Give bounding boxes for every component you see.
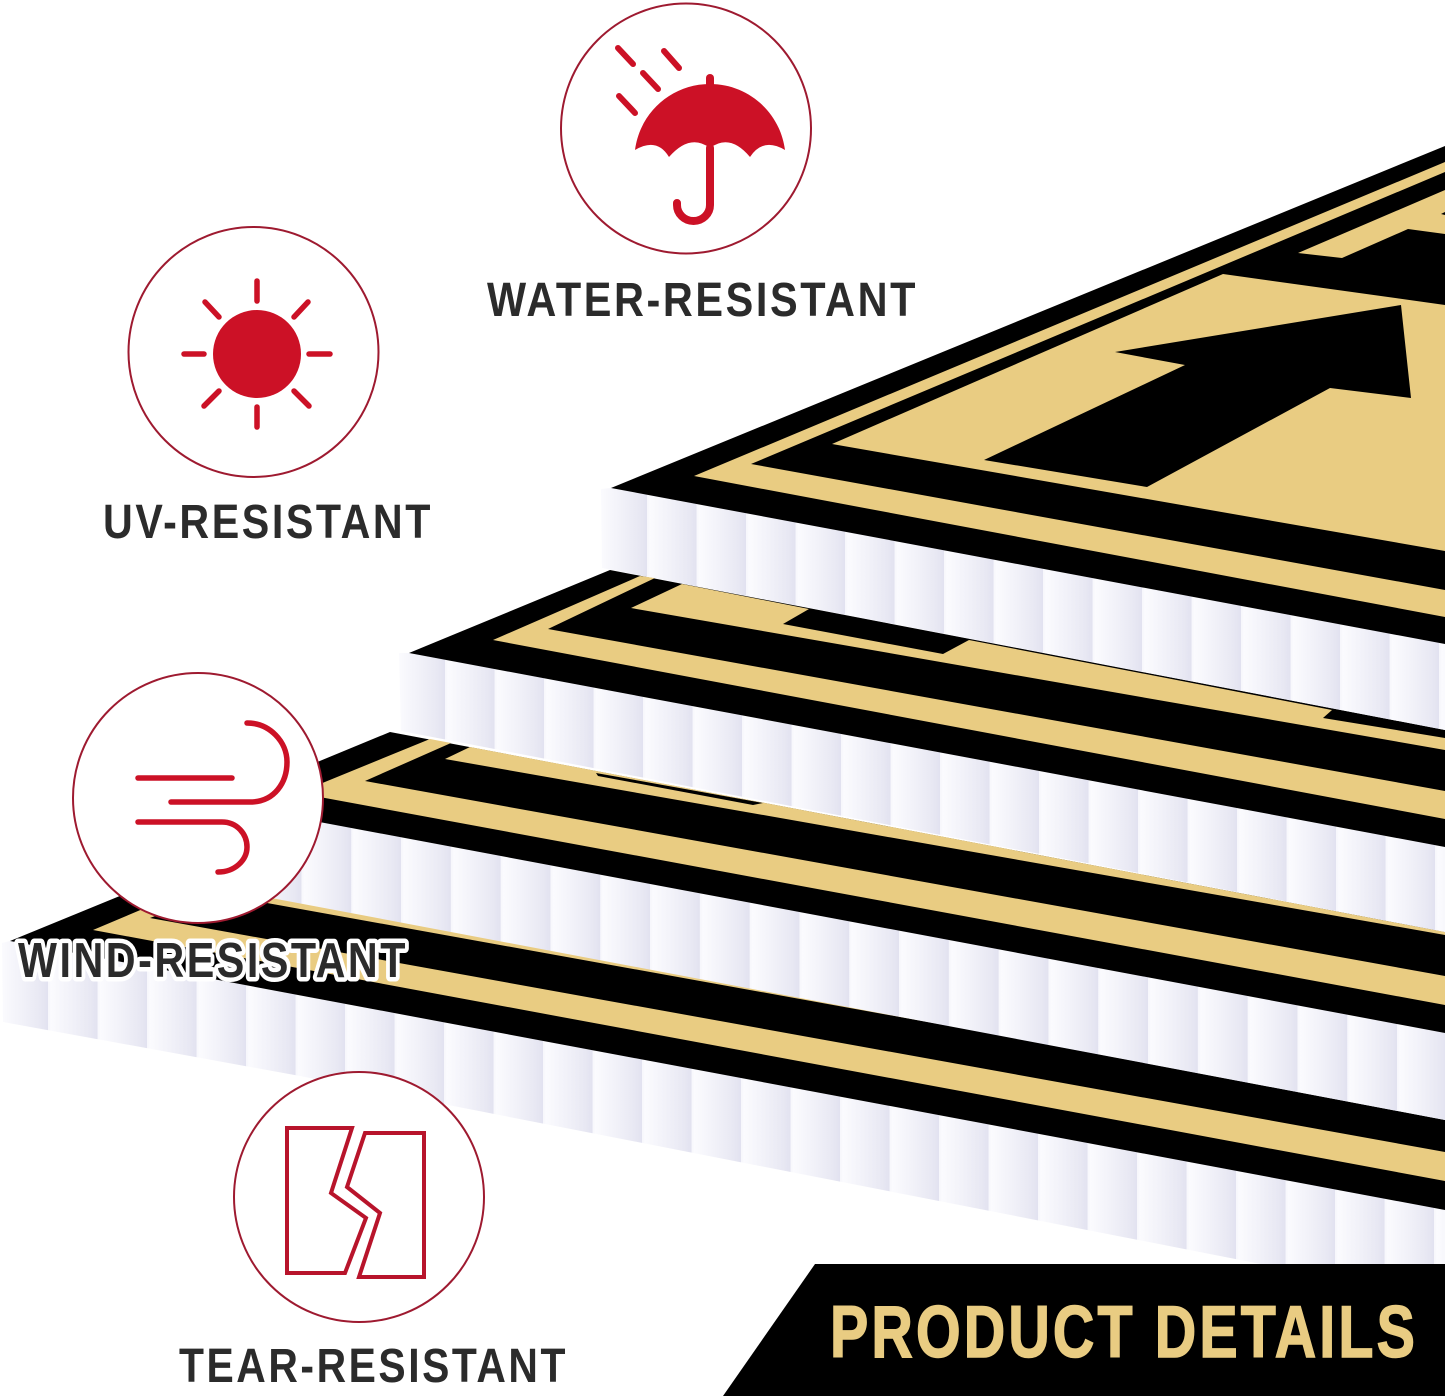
banner: product details bbox=[723, 1264, 1445, 1396]
icon: UV-resistant sun badge bbox=[128, 227, 378, 477]
board 3: third corrugated sign bbox=[208, 732, 1445, 1120]
board 1: top corrugated sign with arrow bbox=[601, 146, 1445, 730]
heading: wind-resistant: WIND-RESISTANT bbox=[18, 934, 408, 988]
board 2: second corrugated sign bbox=[399, 570, 1445, 932]
heading: UV-resistant: UV-RESISTANT bbox=[103, 496, 433, 549]
icon: black arrow on sign bbox=[984, 305, 1411, 487]
icon: tear-resistant badge bbox=[234, 1072, 484, 1322]
heading: water-resistant: WATER-RESISTANT bbox=[487, 274, 918, 327]
board 4: bottom corrugated sign bbox=[2, 877, 1445, 1300]
icon: wind-resistant badge bbox=[73, 673, 323, 923]
heading: tear-resistant: TEAR-RESISTANT bbox=[179, 1340, 568, 1393]
icon: water-resistant umbrella badge bbox=[561, 4, 811, 254]
